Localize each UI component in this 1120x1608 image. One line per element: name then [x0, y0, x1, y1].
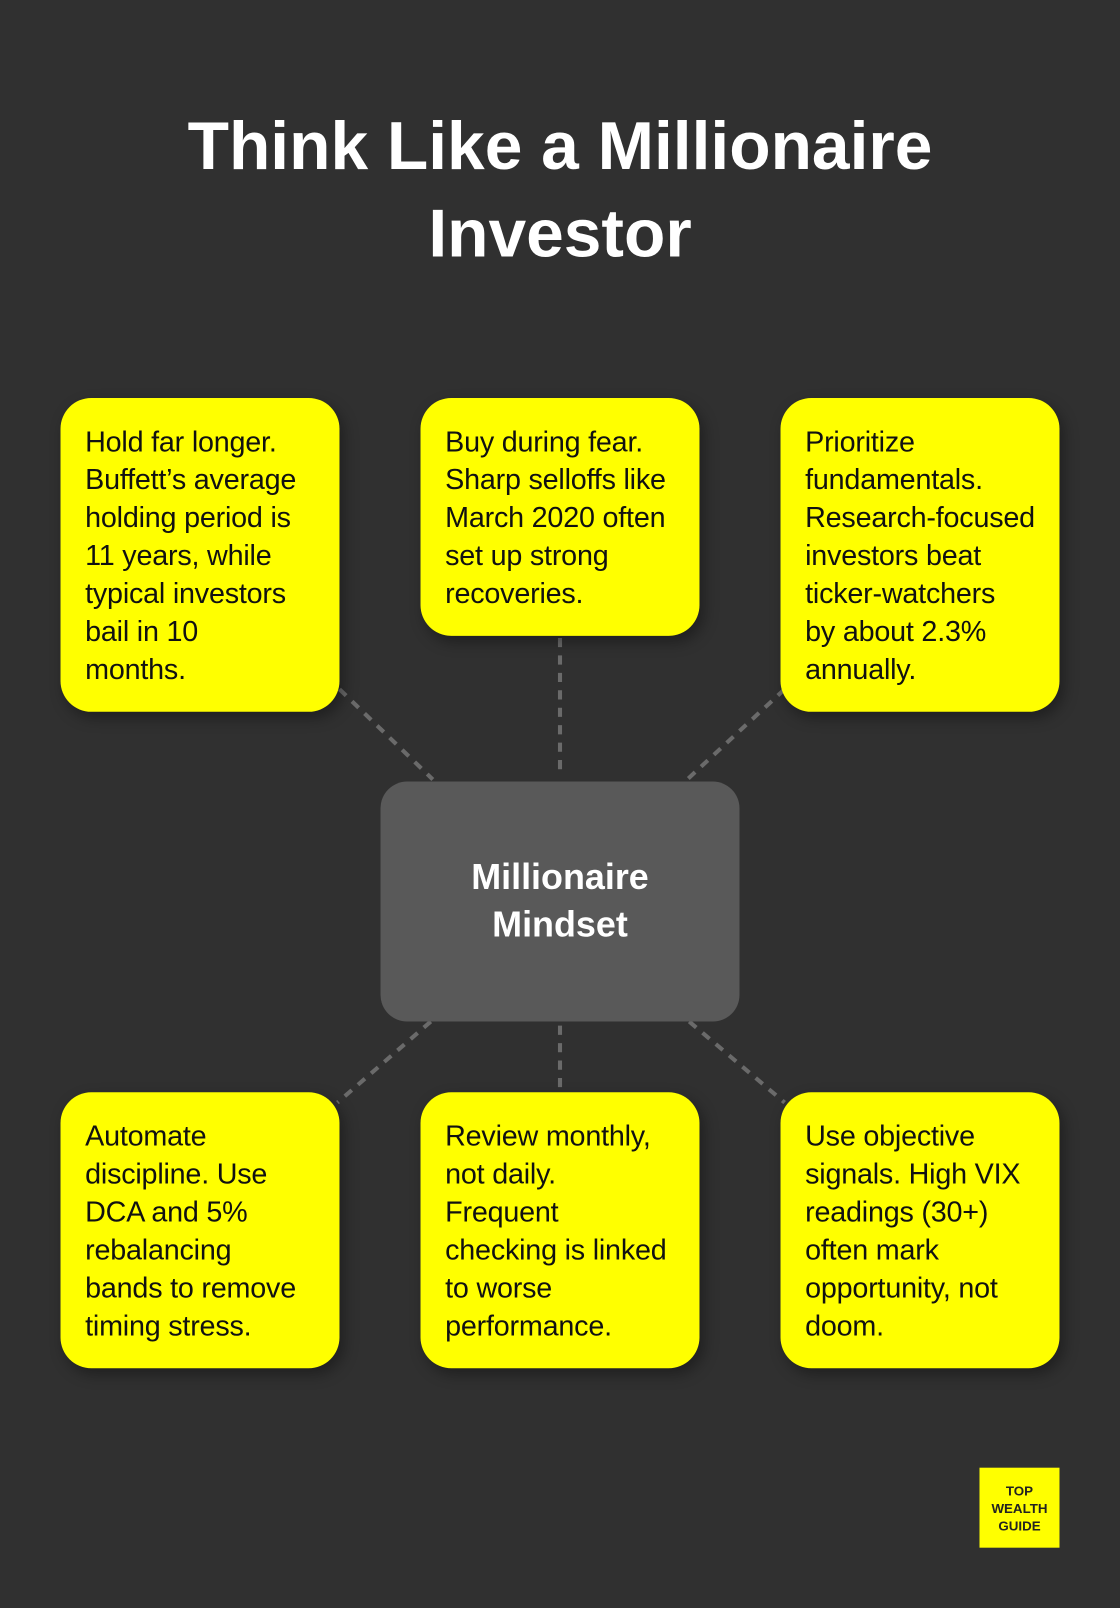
card: automate discipline	[61, 1092, 339, 1368]
card: buy during fear: March 2020 often	[445, 502, 665, 533]
center box: Millionaire	[471, 857, 649, 897]
card: hold far longer: typical investors	[85, 577, 286, 609]
card: prioritize fundamentals: annually.	[805, 653, 916, 685]
card: prioritize fundamentals: Research-focused	[805, 502, 1035, 533]
logo: GUIDE	[998, 1517, 1041, 1533]
card: prioritize fundamentals: Prioritize	[805, 426, 915, 457]
card: hold far longer	[61, 398, 339, 712]
card: buy during fear	[421, 398, 699, 636]
center box	[381, 782, 739, 1022]
card: automate discipline: discipline. Use	[85, 1158, 267, 1190]
card: review monthly: checking is linked	[445, 1234, 667, 1266]
card: buy during fear: recoveries.	[445, 577, 583, 609]
card: review monthly: not daily.	[445, 1158, 556, 1190]
card: automate discipline: Automate	[85, 1120, 206, 1152]
card: review monthly: Review monthly,	[445, 1120, 651, 1152]
card: buy during fear: set up strong	[445, 539, 608, 571]
card: objective signals: Use objective	[805, 1120, 975, 1152]
card: review monthly: Frequent	[445, 1196, 558, 1228]
title: Think Like a Millionaire	[188, 108, 932, 184]
card: review monthly	[421, 1092, 699, 1368]
card: objective signals: readings (30+)	[805, 1196, 988, 1228]
card: hold far longer: Buffett’s average	[85, 464, 296, 495]
card: hold far longer: Hold far longer.	[85, 426, 277, 457]
card: objective signals: often mark	[805, 1234, 939, 1266]
card: automate discipline: timing stress.	[85, 1310, 251, 1342]
center box: Mindset	[492, 905, 628, 945]
card: prioritize fundamentals: ticker-watchers	[805, 577, 995, 609]
title	[188, 108, 932, 271]
card: prioritize fundamentals: by about 2.3%	[805, 615, 986, 647]
logo: TOP	[1006, 1483, 1033, 1498]
card: review monthly: to worse	[445, 1272, 552, 1304]
card: buy during fear: Sharp selloffs like	[445, 464, 666, 495]
card: prioritize fundamentals: fundamentals.	[805, 464, 983, 495]
card: hold far longer: 11 years, while	[85, 539, 271, 571]
logo	[979, 1468, 1059, 1548]
card: hold far longer: months.	[85, 653, 186, 685]
card: objective signals: doom.	[805, 1310, 884, 1342]
card: automate discipline: rebalancing	[85, 1234, 231, 1266]
card: review monthly: performance.	[445, 1310, 612, 1342]
card: objective signals: opportunity, not	[805, 1272, 998, 1304]
card: automate discipline: DCA and 5%	[85, 1196, 248, 1228]
logo: WEALTH	[991, 1500, 1047, 1515]
card: buy during fear: Buy during fear.	[445, 426, 643, 457]
card: prioritize fundamentals: investors beat	[805, 539, 981, 571]
card: objective signals: signals. High VIX	[805, 1158, 1020, 1190]
card: hold far longer: holding period is	[85, 502, 291, 533]
card: automate discipline: bands to remove	[85, 1272, 296, 1304]
card: objective signals	[781, 1092, 1059, 1368]
title: Investor	[428, 195, 692, 271]
card: prioritize fundamentals	[781, 398, 1059, 712]
card: hold far longer: bail in 10	[85, 615, 198, 647]
